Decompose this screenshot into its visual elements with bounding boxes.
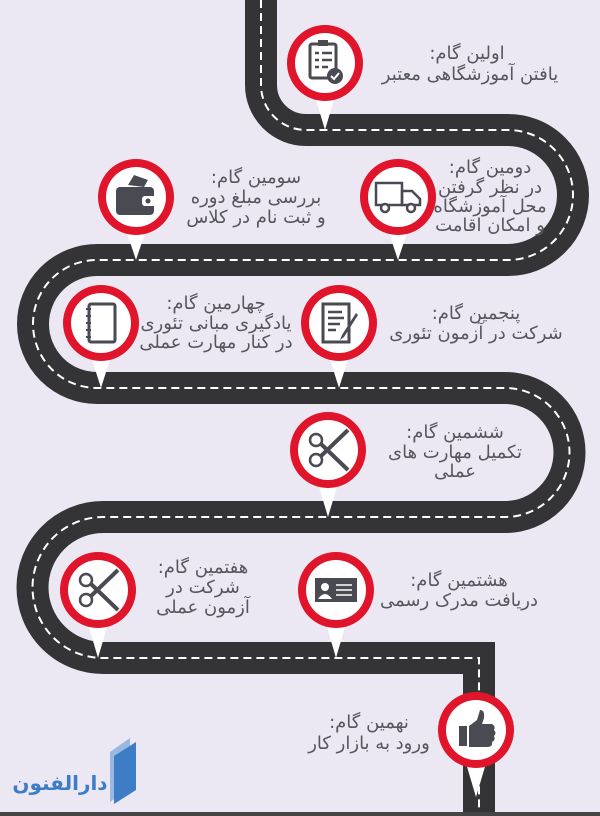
logo: دارالفنون: [12, 771, 108, 795]
text 3: و ثبت نام در کلاس: [186, 207, 326, 228]
text 3: سومین گام:: [211, 166, 301, 188]
text 9: نهمین گام:: [329, 711, 409, 733]
text 8: دریافت مدرک رسمی: [380, 590, 538, 611]
text 9: [307, 711, 430, 754]
text 6: [388, 421, 522, 482]
pin 1: clipboard: [287, 25, 363, 130]
text 6: ششمین گام:: [406, 421, 504, 443]
text 2: دومین گام:: [449, 156, 531, 178]
pin 3: wallet: [98, 159, 174, 260]
pin 6: scissors: [290, 412, 366, 517]
text 7: شرکت در: [165, 577, 240, 598]
text 1: اولین گام:: [429, 42, 505, 64]
text 2: و امکان اقامت: [435, 215, 545, 236]
text 1: [381, 42, 558, 85]
text 7: هفتمین گام:: [158, 556, 248, 578]
text 1: یافتن آموزشگاهی معتبر: [381, 62, 558, 85]
text 7: [156, 556, 251, 618]
text 6: تکمیل مهارت های: [388, 442, 522, 463]
text 9: ورود به بازار کار: [307, 733, 430, 754]
text 4: در کنار مهارت عملی: [139, 332, 293, 353]
text 5: شرکت در آزمون تئوری: [389, 321, 563, 344]
pin 7: scissors: [60, 552, 136, 658]
text 3: [186, 166, 326, 228]
pin 4: notebook: [63, 285, 139, 388]
text 8: هشتمین گام:: [410, 569, 508, 591]
text 7: آزمون عملی: [156, 595, 251, 618]
text 8: [380, 569, 538, 611]
text 2: [433, 156, 547, 236]
logo: [12, 738, 136, 804]
text 5: [389, 302, 563, 344]
pin 5: document with pen: [301, 285, 377, 388]
text 4: یادگیری مبانی تئوری: [140, 312, 292, 334]
pin 8: id card: [298, 552, 374, 658]
pin 2: truck: [360, 159, 436, 260]
text 4: [139, 292, 293, 353]
text 4: چهارمین گام:: [166, 292, 266, 314]
text 3: بررسی مبلغ دوره: [191, 187, 321, 208]
text 6: عملی: [434, 461, 476, 482]
text 5: پنجمین گام:: [432, 302, 520, 324]
text 2: در نظر گرفتن: [438, 176, 542, 198]
text 2: محل آموزشگاه: [433, 194, 547, 217]
pin 9: thumbs up: [438, 692, 514, 797]
